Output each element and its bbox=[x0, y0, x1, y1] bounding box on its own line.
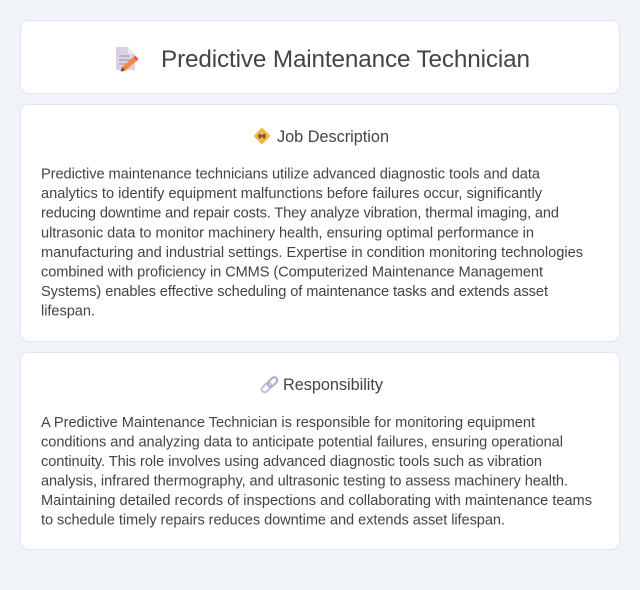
icon: chain link bbox=[260, 376, 279, 394]
job description body text: lifespan. bbox=[41, 304, 95, 320]
job description body text: analytics to identify equipment malfunctions before failures occur, significantly bbox=[41, 186, 543, 202]
job description body text: manufacturing and industrial settings. Expertise in condition monitoring technologies bbox=[41, 245, 583, 261]
title text: Predictive Maintenance Technician bbox=[161, 46, 530, 73]
responsibility body text: conditions and analyzing data to anticipate potential failures, ensuring operational bbox=[41, 434, 563, 450]
responsibility body text: A Predictive Maintenance Technician is responsible for monitoring equipment bbox=[41, 415, 535, 431]
panel: title bbox=[20, 20, 620, 94]
responsibility body text: continuity. This role involves using advanced diagnostic tools such as vibration bbox=[41, 454, 542, 470]
job description body text: Systems) enables effective scheduling of maintenance tasks and extends asset bbox=[41, 284, 548, 300]
job description body text: combined with proficiency in CMMS (Computerized Maintenance Management bbox=[41, 264, 543, 280]
panel: responsibility bbox=[20, 352, 620, 550]
panel: job description bbox=[20, 104, 620, 342]
job description body text bbox=[41, 166, 583, 320]
job description body text: ultrasonic data to monitor machinery health, ensuring optimal performance in bbox=[41, 225, 534, 241]
icon: document with pencil bbox=[116, 47, 139, 72]
responsibility body text: to schedule timely repairs reduces downtime and extends asset lifespan. bbox=[41, 512, 505, 528]
icon: warning diamond bbox=[254, 128, 270, 144]
responsibility body text: Maintaining detailed records of inspections and collaborating with maintenance teams bbox=[41, 493, 592, 509]
heading: job description: Job Description bbox=[277, 128, 389, 146]
job description body text: Predictive maintenance technicians utilize advanced diagnostic tools and data bbox=[41, 166, 541, 182]
job description body text: reducing downtime and repair costs. They analyze vibration, thermal imaging, and bbox=[41, 206, 559, 222]
responsibility body text: analysis, infrared thermography, and ultrasonic testing to assess machinery health. bbox=[41, 474, 568, 490]
responsibility body text bbox=[41, 415, 592, 528]
heading: responsibility: Responsibility bbox=[283, 376, 384, 394]
